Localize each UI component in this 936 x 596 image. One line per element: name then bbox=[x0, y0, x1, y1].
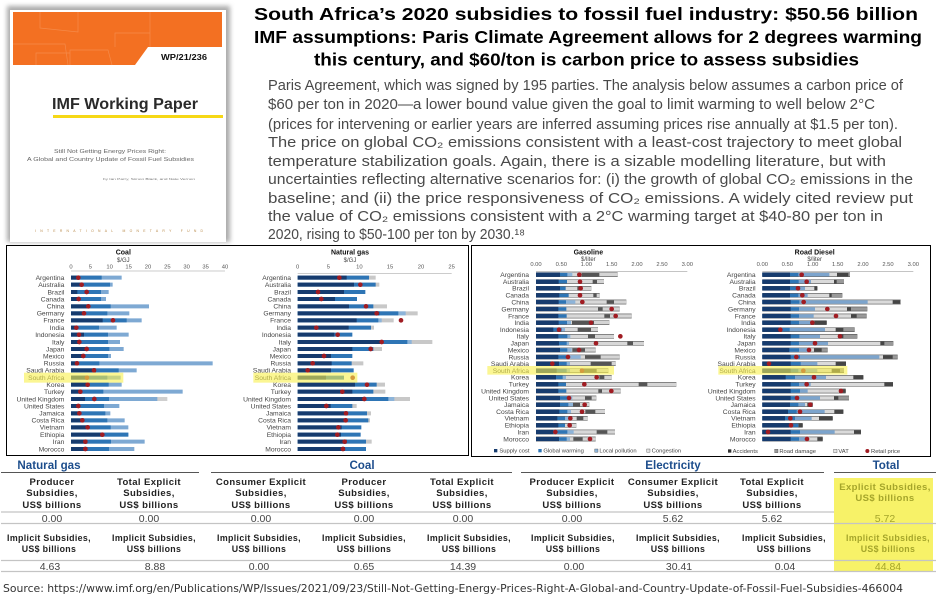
explicit subsidies column headers: US$ billions bbox=[742, 500, 802, 511]
explicit subsidies column headers: US$ billions bbox=[231, 500, 291, 511]
coal country labels: United Kingdom bbox=[17, 396, 65, 403]
excerpt text block: Paris Agreement carbon price: $60 per ton in 2020—a lower bound value given the goal to limit warming to well below 2°C bbox=[268, 97, 875, 113]
chart: gasoline bbox=[481, 250, 694, 455]
title bbox=[254, 4, 922, 70]
coal axis: 20 bbox=[145, 265, 152, 271]
total implicit value: 44.84 bbox=[875, 561, 901, 573]
explicit subsidies values: 0.00 bbox=[251, 513, 271, 525]
road diesel country labels: France bbox=[735, 313, 756, 320]
road diesel country labels: Jamaica bbox=[731, 402, 756, 409]
implicit subsidies column headers: Implicit Subsidies, bbox=[112, 533, 196, 543]
road diesel country labels: Japan bbox=[737, 341, 756, 348]
coal country labels bbox=[17, 275, 65, 453]
gasoline country labels: Vietnam bbox=[504, 416, 529, 423]
gasoline country labels: Korea bbox=[511, 375, 529, 382]
excerpt text block: Paris Agreement carbon price: Paris Agreement, which was signed by 195 parties. The analysis below assumes a carbon price of bbox=[268, 78, 904, 94]
explicit subsidies column headers: Subsidies, bbox=[436, 488, 488, 499]
road diesel country labels: United Kingdom bbox=[708, 388, 756, 395]
gasoline axis: 1.00 bbox=[581, 262, 593, 268]
implicit subsidies column headers bbox=[7, 533, 826, 554]
natural gas axis: 10 bbox=[356, 265, 363, 271]
chart: coal: $/GJ bbox=[117, 258, 130, 264]
coal South Africa highlight bbox=[24, 373, 123, 383]
gasoline country labels: United Kingdom bbox=[481, 388, 529, 395]
implicit subsidies column headers: US$ billions bbox=[232, 544, 286, 554]
road diesel legend: Retail price bbox=[871, 449, 900, 455]
implicit subsidies column headers: US$ billions bbox=[22, 544, 76, 554]
excerpt text block: Paris Agreement carbon price: 2020, rising to $50-100 per ton by 2030.¹⁸ bbox=[268, 227, 525, 243]
natural gas axis: 0 bbox=[296, 265, 300, 271]
road diesel country labels: Argentina bbox=[727, 272, 756, 279]
natural gas country labels: China bbox=[273, 304, 291, 311]
gasoline axis: 1.50 bbox=[606, 262, 618, 268]
explicit subsidies column headers: US$ billions bbox=[542, 500, 602, 511]
explicit subsidies column headers: Subsidies, bbox=[647, 488, 699, 499]
gasoline axis: 3.00 bbox=[682, 262, 694, 268]
coal retail price markers bbox=[76, 278, 113, 449]
table section headers: Electricity bbox=[645, 459, 701, 472]
coal country labels: Italy bbox=[52, 339, 65, 346]
road diesel country labels: China bbox=[738, 299, 756, 306]
gasoline axis: 0.00 bbox=[530, 262, 542, 268]
road diesel country labels: Costa Rica bbox=[723, 409, 756, 416]
explicit subsidies column headers: US$ billions bbox=[334, 500, 394, 511]
total explicit value: 5.72 bbox=[875, 513, 895, 525]
source line: Source: https://www.imf.org/en/Publications/WP/Issues/2021/09/23/Still-Not-Getting-Energy-Prices-Right-A-Global-and-Country-Update-of-Fossil-Fuel-Subsidies-466004 bbox=[3, 582, 903, 595]
coal country labels: Mexico bbox=[43, 353, 65, 360]
gasoline country labels bbox=[481, 272, 530, 443]
natural gas country labels: Turkey bbox=[271, 389, 292, 396]
total implicit header: Implicit Subsidies, bbox=[846, 533, 930, 543]
natural gas country labels: Brazil bbox=[274, 289, 291, 296]
table section headers bbox=[1, 459, 936, 472]
coal axis: 30 bbox=[183, 265, 191, 271]
report cover: IMF Working Paper: by Ian Parry, Simon Black, and Nate Vernon bbox=[103, 177, 196, 181]
gasoline axis bbox=[530, 262, 694, 272]
natural gas country labels: Jamaica bbox=[266, 411, 291, 418]
natural gas country labels: Canada bbox=[267, 296, 291, 303]
coal country labels: Canada bbox=[41, 296, 65, 303]
table section headers: Coal bbox=[349, 459, 375, 472]
explicit subsidies column headers: Subsidies, bbox=[26, 488, 78, 499]
coal country labels: Saudi Arabia bbox=[26, 368, 65, 375]
total column highlight bbox=[834, 478, 933, 572]
coal axis: 15 bbox=[125, 265, 132, 271]
gasoline axis: 2.50 bbox=[656, 262, 668, 268]
excerpt text block: Paris Agreement carbon price bbox=[268, 78, 913, 243]
gasoline legend: Supply cost bbox=[499, 449, 530, 455]
road diesel axis: 0.00 bbox=[757, 262, 769, 268]
gasoline stacked bars bbox=[536, 275, 676, 439]
implicit subsidies values: 30.41 bbox=[666, 561, 692, 573]
explicit subsidies values bbox=[42, 513, 782, 525]
implicit subsidies values bbox=[40, 561, 795, 573]
road diesel country labels: Russia bbox=[735, 354, 756, 361]
implicit subsidies values: 4.63 bbox=[40, 561, 60, 573]
report cover: IMF Working Paper: IMF Working Paper bbox=[52, 96, 198, 113]
gasoline country labels: Argentina bbox=[500, 272, 529, 279]
explicit subsidies column headers: US$ billions bbox=[119, 500, 179, 511]
chart: gasoline: Gasoline bbox=[574, 250, 603, 257]
excerpt text block: Paris Agreement carbon price: baseline; and (ii) the price responsiveness of CO₂ emissions. A widely cited review put bbox=[268, 191, 913, 207]
coal country labels: India bbox=[50, 325, 65, 332]
road diesel country labels: Iran bbox=[744, 429, 756, 436]
gasoline country labels: Turkey bbox=[509, 382, 530, 389]
natural gas country labels: Costa Rica bbox=[258, 418, 291, 425]
explicit subsidies column headers: Subsidies, bbox=[546, 488, 598, 499]
implicit subsidies values: 0.65 bbox=[354, 561, 374, 573]
table section headers: Total bbox=[873, 459, 899, 472]
natural gas axis: 25 bbox=[448, 265, 455, 271]
coal country labels: Japan bbox=[46, 346, 65, 353]
coal axis: 40 bbox=[222, 265, 229, 271]
coal country labels: Brazil bbox=[48, 289, 65, 296]
natural gas country labels: Japan bbox=[273, 346, 291, 353]
gasoline axis: 2.00 bbox=[631, 262, 643, 268]
coal country labels: France bbox=[43, 318, 65, 325]
gasoline country labels: Jamaica bbox=[504, 402, 529, 409]
natural gas axis: 5 bbox=[327, 265, 330, 271]
road diesel axis: 2.50 bbox=[882, 262, 894, 268]
natural gas country labels: Australia bbox=[265, 282, 291, 289]
road diesel country labels: Turkey bbox=[735, 382, 756, 389]
explicit subsidies values: 0.00 bbox=[139, 513, 159, 525]
coal country labels: Australia bbox=[38, 282, 65, 289]
natural gas country labels: Morocco bbox=[265, 446, 291, 453]
panel: coal and natural gas charts frame bbox=[6, 246, 468, 456]
explicit subsidies values: 5.62 bbox=[762, 513, 782, 525]
natural gas country labels: Vietnam bbox=[266, 425, 291, 432]
implicit subsidies column headers: Implicit Subsidies, bbox=[742, 533, 826, 543]
coal country labels: Indonesia bbox=[35, 332, 65, 339]
gasoline country labels: South Africa bbox=[493, 368, 529, 375]
excerpt text block: Paris Agreement carbon price: the value of CO₂ emissions consistent with a 2°C warming target at $40-80 per ton in bbox=[268, 209, 883, 225]
explicit subsidies column headers: Subsidies, bbox=[746, 488, 798, 499]
chart: coal bbox=[17, 250, 229, 453]
road diesel stacked bars bbox=[762, 275, 901, 439]
natural gas country labels: Korea bbox=[273, 382, 291, 389]
explicit subsidies column headers: Total Explicit bbox=[430, 477, 494, 488]
table rules bbox=[1, 512, 936, 572]
coal country labels: Argentina bbox=[36, 275, 65, 282]
explicit subsidies column headers: Producer bbox=[342, 477, 386, 488]
explicit subsidies values: 0.00 bbox=[453, 513, 473, 525]
road diesel country labels: India bbox=[741, 320, 756, 327]
road diesel country labels: Korea bbox=[738, 375, 756, 382]
explicit subsidies column headers: Total Explicit bbox=[740, 477, 804, 488]
road diesel South Africa highlight bbox=[718, 366, 847, 375]
coal axis: 5 bbox=[89, 265, 92, 271]
excerpt text block: Paris Agreement carbon price: (prices for intervening or earlier years are inferred assuming prices rise annually at $1.5 per ton). bbox=[268, 117, 898, 133]
road diesel country labels: Canada bbox=[732, 293, 756, 300]
road diesel country labels: Morocco bbox=[730, 436, 756, 443]
gasoline country labels: Costa Rica bbox=[496, 409, 529, 416]
report cover: IMF Working Paper: A Global and Country Update of Fossil Fuel Subsidies bbox=[27, 157, 195, 163]
chart: road diesel: $/liter bbox=[807, 257, 822, 263]
gasoline legend: Congestion bbox=[652, 449, 681, 455]
implicit subsidies values: 14.39 bbox=[450, 561, 476, 573]
total explicit header bbox=[839, 482, 931, 504]
chart: natural gas: Natural gas bbox=[331, 250, 369, 257]
gasoline country labels: France bbox=[508, 313, 529, 320]
natural gas country labels: United Kingdom bbox=[243, 396, 291, 403]
natural gas country labels bbox=[243, 275, 292, 453]
explicit subsidies column headers: Consumer Explicit bbox=[628, 477, 719, 488]
coal country labels: Russia bbox=[44, 361, 65, 368]
natural gas country labels: France bbox=[270, 318, 291, 325]
explicit subsidies values: 5.62 bbox=[663, 513, 683, 525]
road diesel legend: Road damage bbox=[779, 449, 816, 455]
natural gas retail price markers bbox=[308, 278, 401, 449]
gasoline country labels: Brazil bbox=[512, 286, 529, 293]
coal country labels: Germany bbox=[37, 311, 65, 318]
road diesel axis: 1.00 bbox=[807, 262, 819, 268]
total explicit header: US$ billions bbox=[855, 493, 915, 504]
coal country labels: South Africa bbox=[28, 375, 65, 382]
road diesel country labels: Mexico bbox=[734, 347, 756, 354]
coal axis: 35 bbox=[202, 265, 209, 271]
coal axis: 25 bbox=[164, 265, 171, 271]
chart: road diesel: Road Diesel bbox=[795, 250, 835, 257]
explicit subsidies column headers bbox=[22, 477, 804, 511]
natural gas axis bbox=[296, 265, 455, 273]
natural gas stacked bars bbox=[298, 278, 432, 449]
road diesel country labels: Ethiopia bbox=[731, 423, 756, 430]
implicit subsidies column headers: US$ billions bbox=[442, 544, 496, 554]
gasoline retail price markers bbox=[552, 275, 620, 439]
gasoline country labels: Canada bbox=[505, 293, 529, 300]
coal country labels: Jamaica bbox=[39, 411, 65, 418]
gasoline country labels: Saudi Arabia bbox=[491, 361, 529, 368]
road diesel country labels bbox=[708, 272, 756, 443]
natural gas country labels: South Africa bbox=[255, 375, 291, 382]
coal country labels: Morocco bbox=[39, 446, 65, 453]
natural gas country labels: Mexico bbox=[270, 353, 291, 360]
road diesel retail price markers bbox=[768, 275, 841, 439]
report cover: IMF Working Paper: WP/21/236 bbox=[161, 53, 208, 62]
chart: gasoline: $/liter bbox=[581, 257, 596, 263]
natural gas South Africa highlight bbox=[253, 373, 357, 383]
road diesel legend bbox=[728, 449, 900, 455]
natural gas country labels: Ethiopia bbox=[267, 432, 291, 439]
gasoline axis: 0.50 bbox=[556, 262, 568, 268]
coal axis: 10 bbox=[106, 265, 114, 271]
implicit subsidies column headers: US$ billions bbox=[651, 544, 705, 554]
road diesel country labels: Australia bbox=[730, 279, 756, 286]
gasoline country labels: Iran bbox=[517, 429, 529, 436]
gasoline country labels: China bbox=[511, 299, 529, 306]
report cover: IMF Working Paper bbox=[7, 6, 230, 242]
gasoline legend: Local pollution bbox=[599, 449, 637, 455]
explicit subsidies column headers: Subsidies, bbox=[123, 488, 175, 499]
title: South Africa’s 2020 subsidies to fossil fuel industry: $50.56 billion bbox=[254, 4, 918, 24]
explicit subsidies column headers: Producer bbox=[30, 477, 74, 488]
implicit subsidies column headers: Implicit Subsidies, bbox=[322, 533, 406, 543]
natural gas country labels: Saudi Arabia bbox=[253, 368, 291, 375]
implicit subsidies column headers: Implicit Subsidies, bbox=[427, 533, 511, 543]
gasoline country labels: Italy bbox=[517, 334, 530, 341]
explicit subsidies column headers: Consumer Explicit bbox=[216, 477, 307, 488]
natural gas country labels: Argentina bbox=[262, 275, 291, 282]
total implicit header bbox=[846, 533, 930, 554]
report cover: IMF Working Paper: Still Not Getting Energy Prices Right: bbox=[54, 149, 166, 155]
coal country labels: Costa Rica bbox=[31, 418, 65, 425]
gasoline country labels: Indonesia bbox=[500, 327, 529, 334]
implicit subsidies values: 0.04 bbox=[775, 561, 795, 573]
road diesel country labels: Vietnam bbox=[731, 416, 756, 423]
road diesel country labels: United States bbox=[715, 395, 756, 402]
coal country labels: Turkey bbox=[44, 389, 65, 396]
implicit subsidies column headers: US$ billions bbox=[127, 544, 181, 554]
total explicit header: Explicit Subsidies, bbox=[839, 482, 931, 493]
road diesel country labels: Italy bbox=[743, 334, 756, 341]
natural gas country labels: United States bbox=[251, 403, 292, 410]
gasoline South Africa highlight bbox=[487, 366, 614, 375]
explicit subsidies column headers: Subsidies, bbox=[235, 488, 287, 499]
road diesel country labels: Indonesia bbox=[727, 327, 756, 334]
explicit subsidies column headers: US$ billions bbox=[22, 500, 82, 511]
gasoline country labels: Ethiopia bbox=[505, 423, 529, 430]
implicit subsidies values: 8.88 bbox=[145, 561, 165, 573]
explicit subsidies column headers: Total Explicit bbox=[117, 477, 181, 488]
road diesel axis: 3.00 bbox=[908, 262, 920, 268]
explicit subsidies column headers: Subsidies, bbox=[338, 488, 390, 499]
coal stacked bars bbox=[71, 278, 213, 449]
excerpt text block: Paris Agreement carbon price: temperature stabilization goals. Again, there is a sizable modelling literature, but with bbox=[268, 154, 886, 170]
chart: road diesel bbox=[708, 250, 920, 455]
explicit subsidies column headers: Producer Explicit bbox=[530, 477, 615, 488]
implicit subsidies column headers: US$ billions bbox=[546, 544, 600, 554]
chart: coal: Coal bbox=[116, 250, 131, 257]
explicit subsidies column headers: US$ billions bbox=[643, 500, 703, 511]
gasoline legend: Global warming bbox=[543, 449, 584, 455]
road diesel axis: 2.00 bbox=[857, 262, 869, 268]
road diesel legend: Accidents bbox=[733, 449, 758, 455]
gasoline country labels: Russia bbox=[508, 354, 529, 361]
explicit subsidies values: 0.00 bbox=[42, 513, 62, 525]
excerpt text block: Paris Agreement carbon price: The price on global CO₂ emissions consistent with a least-cost trajectory to meet global bbox=[268, 135, 902, 151]
natural gas country labels: Iran bbox=[279, 439, 291, 446]
title: IMF assumptions: Paris Climate Agreement allows for 2 degrees warming bbox=[254, 27, 922, 47]
natural gas axis: 15 bbox=[387, 265, 393, 271]
natural gas axis: 20 bbox=[418, 265, 425, 271]
coal country labels: Vietnam bbox=[40, 425, 65, 432]
coal country labels: Iran bbox=[53, 439, 65, 446]
gasoline country labels: Mexico bbox=[508, 347, 529, 354]
road diesel country labels: Germany bbox=[728, 306, 756, 313]
road diesel axis bbox=[757, 262, 920, 272]
road diesel axis: 0.50 bbox=[782, 262, 794, 268]
gasoline country labels: Morocco bbox=[503, 436, 529, 443]
natural gas country labels: Indonesia bbox=[262, 332, 291, 339]
road diesel country labels: Saudi Arabia bbox=[718, 361, 756, 368]
coal country labels: Korea bbox=[46, 382, 65, 389]
gasoline legend bbox=[494, 449, 681, 455]
natural gas country labels: Russia bbox=[270, 361, 291, 368]
natural gas country labels: India bbox=[276, 325, 291, 332]
coal country labels: China bbox=[47, 304, 65, 311]
road diesel country labels: South Africa bbox=[719, 368, 756, 375]
subsidies table bbox=[1, 459, 936, 573]
table section headers: Natural gas bbox=[17, 459, 81, 472]
panel: gasoline and road diesel charts frame bbox=[472, 246, 930, 456]
implicit subsidies column headers: Implicit Subsidies, bbox=[636, 533, 720, 543]
gasoline country labels: Japan bbox=[511, 341, 529, 348]
chart: natural gas bbox=[243, 250, 455, 453]
excerpt text block: Paris Agreement carbon price: uncertainties reflecting alternative scenarios for: (i) the growth of global CO₂ emissions in the bbox=[268, 172, 913, 188]
title: this century, and $60/ton is carbon price to assess subsidies bbox=[314, 50, 859, 70]
gasoline country labels: United States bbox=[489, 395, 530, 402]
coal axis: 0 bbox=[69, 265, 73, 271]
gasoline country labels: Australia bbox=[503, 279, 529, 286]
implicit subsidies column headers: Implicit Subsidies, bbox=[217, 533, 301, 543]
natural gas country labels: Italy bbox=[279, 339, 292, 346]
implicit subsidies values: 0.00 bbox=[564, 561, 584, 573]
coal country labels: United States bbox=[24, 403, 65, 410]
implicit subsidies column headers: Implicit Subsidies, bbox=[7, 533, 91, 543]
report cover: IMF Working Paper: INTERNATIONAL MONETARY FUND bbox=[35, 229, 204, 233]
natural gas country labels: Germany bbox=[263, 311, 292, 318]
gasoline country labels: India bbox=[514, 320, 529, 327]
implicit subsidies column headers: US$ billions bbox=[337, 544, 391, 554]
implicit subsidies values: 0.00 bbox=[249, 561, 269, 573]
explicit subsidies values: 0.00 bbox=[354, 513, 374, 525]
coal axis bbox=[69, 265, 229, 271]
road diesel legend: VAT bbox=[838, 449, 849, 455]
road diesel country labels: Brazil bbox=[739, 286, 756, 293]
total implicit header: US$ billions bbox=[861, 544, 915, 554]
coal country labels: Ethiopia bbox=[40, 432, 65, 439]
road diesel axis: 1.50 bbox=[832, 262, 844, 268]
implicit subsidies column headers: Implicit Subsidies, bbox=[531, 533, 615, 543]
chart: natural gas: $/GJ bbox=[344, 258, 356, 264]
implicit subsidies column headers: US$ billions bbox=[757, 544, 811, 554]
explicit subsidies column headers: US$ billions bbox=[432, 500, 492, 511]
gasoline country labels: Germany bbox=[501, 306, 530, 313]
explicit subsidies values: 0.00 bbox=[562, 513, 582, 525]
